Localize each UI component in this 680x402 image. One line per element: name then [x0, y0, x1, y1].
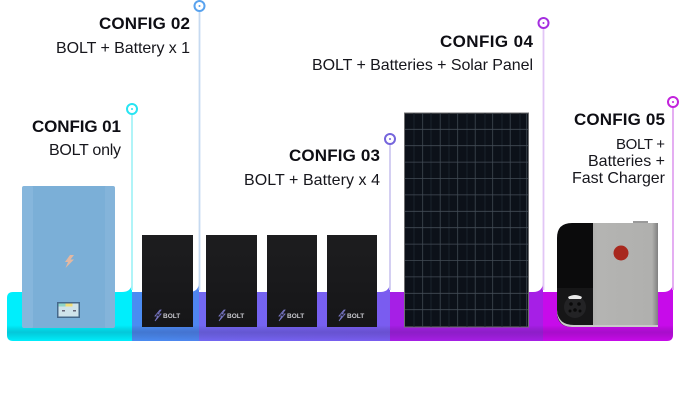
text: config 05 description: BOLT + — [616, 136, 665, 153]
charging socket — [564, 295, 586, 318]
marker line and dot: config 01 — [127, 104, 137, 290]
battery 1: BOLT — [163, 313, 180, 320]
red logo badge — [614, 246, 628, 260]
battery 2: BOLT — [227, 313, 244, 320]
battery 1 — [142, 235, 193, 327]
marker line and dot: config 02 — [194, 1, 204, 290]
text: config 03 description: BOLT + Battery x 4 — [244, 172, 380, 189]
text: config 05 description: Batteries + — [588, 153, 665, 170]
battery 4 — [327, 235, 377, 327]
battery 3 — [267, 235, 317, 327]
icon: lightning bolt — [65, 255, 74, 268]
battery 2 — [206, 235, 257, 327]
text: config 04 description: BOLT + Batteries + Solar Panel — [312, 57, 533, 74]
heading: config 01: CONFIG 01 — [32, 117, 121, 136]
marker line and dot: config 03 — [385, 134, 395, 290]
marker line and dot: config 05 — [668, 97, 678, 290]
battery 3: BOLT — [287, 313, 304, 320]
text: config 02 description: BOLT + Battery x 1 — [56, 40, 190, 57]
BOLT unit — [22, 186, 115, 328]
solar panel — [404, 113, 528, 327]
text: config 01 description: BOLT only — [49, 142, 121, 159]
heading: config 02: CONFIG 02 — [99, 14, 190, 33]
display screen — [57, 302, 80, 318]
battery 4: BOLT — [347, 313, 364, 320]
text: config 05 description — [572, 136, 666, 187]
heading: config 03: CONFIG 03 — [289, 146, 380, 165]
heading: config 04: CONFIG 04 — [440, 32, 534, 51]
text: config 05 description: Fast Charger — [572, 170, 666, 187]
base bar with coloured segments — [7, 282, 673, 341]
fast charger — [557, 221, 658, 327]
heading: config 05: CONFIG 05 — [574, 110, 665, 129]
marker line and dot: config 04 — [538, 18, 548, 290]
